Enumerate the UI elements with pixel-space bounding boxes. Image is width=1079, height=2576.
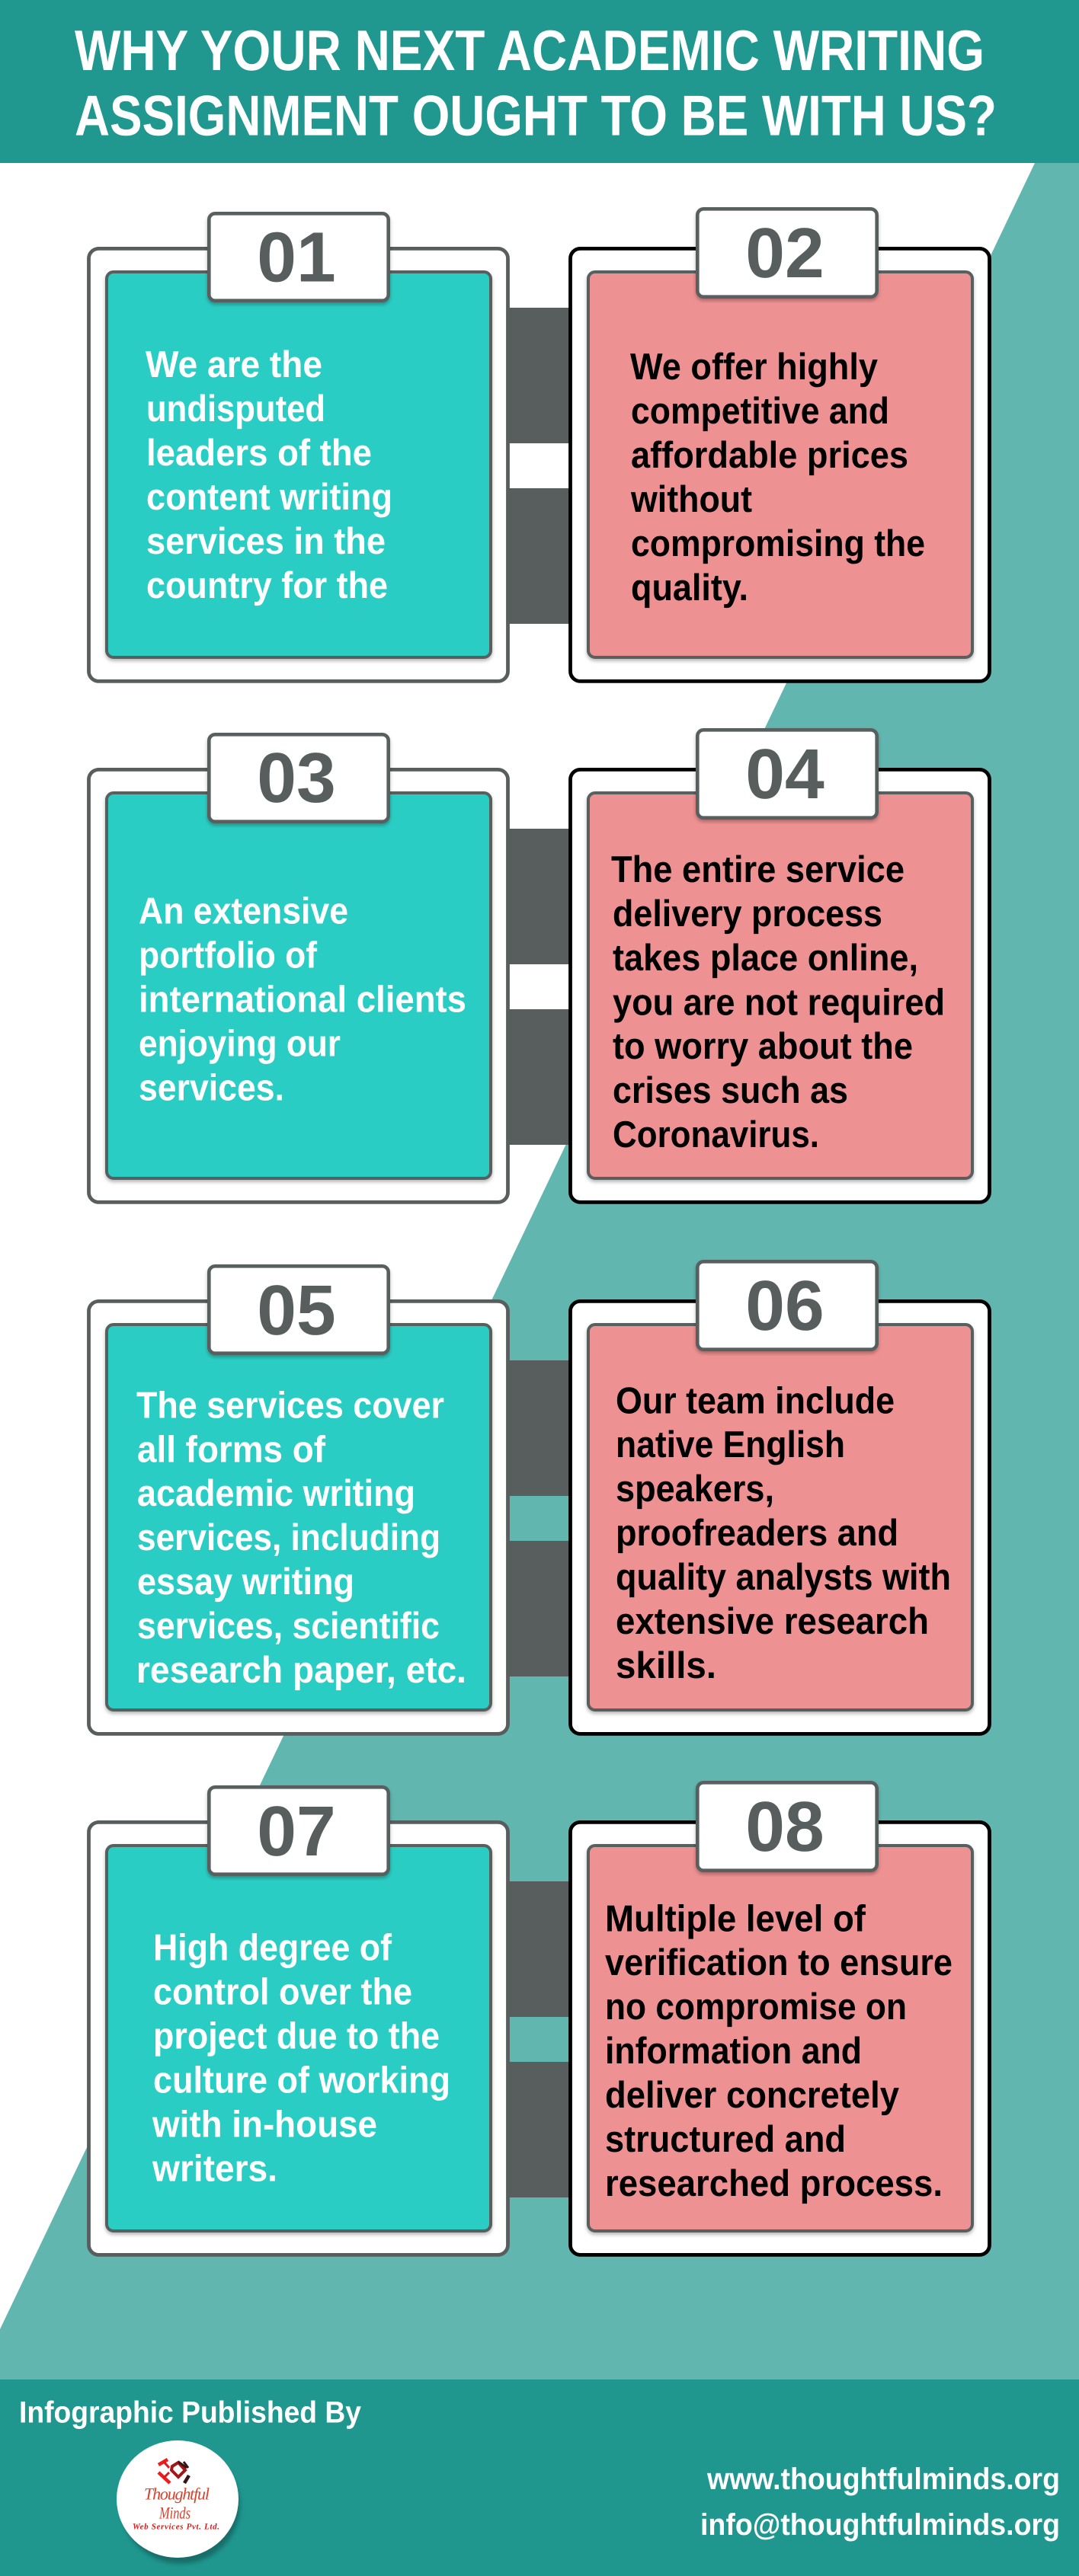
header banner (0, 0, 1079, 163)
text: card 04: you are not required (613, 982, 945, 1023)
title (75, 18, 997, 148)
badge: 03 (209, 734, 389, 822)
panel: card 07 (88, 1787, 507, 2255)
badge: 04 (697, 730, 877, 818)
text: card 08: information and (605, 2031, 862, 2072)
text: card 02: We offer highly (630, 347, 878, 388)
text: card 06: Our team include (616, 1380, 895, 1421)
text: card 02: quality. (631, 567, 748, 609)
email: info@thoughtfulminds.org (700, 2508, 1060, 2542)
badge: 04: 04 (745, 734, 824, 813)
panel: card 04 (570, 730, 989, 1202)
text: card 05: essay writing (137, 1561, 354, 1603)
text: card 05: academic writing (137, 1473, 415, 1514)
badge: 08 (697, 1782, 877, 1871)
text: card 02: competitive and (631, 391, 889, 432)
text: card 08: verification to ensure (605, 1942, 953, 1983)
text: card 06 (616, 1380, 951, 1686)
connectors: row 4 (507, 1881, 571, 2197)
text: card 01: country for the (146, 565, 388, 606)
footer band (0, 2379, 1079, 2576)
badge: 06 (697, 1261, 877, 1350)
text: card 03: enjoying our (139, 1023, 341, 1064)
text: card 05: services, including (137, 1517, 440, 1558)
text: card 05: The services cover (136, 1385, 444, 1426)
text: card 08 (605, 1898, 953, 2204)
panel: card 06 (570, 1261, 989, 1734)
text: card 03: portfolio of (139, 935, 318, 976)
text: card 07: culture of working (153, 2060, 450, 2101)
text: card 05: research paper, etc. (136, 1650, 466, 1691)
website: www.thoughtfulminds.org (706, 2463, 1060, 2496)
text: card 04 (611, 849, 945, 1155)
text: card 02: affordable prices (631, 435, 908, 476)
text: card 01 (146, 344, 392, 606)
text: card 04: to worry about the (613, 1026, 913, 1067)
badge: 01 (209, 213, 389, 301)
text: card 04: takes place online, (613, 938, 918, 979)
logo tagline: Web Services Pvt. Ltd. (133, 2523, 219, 2532)
text: card 05: all forms of (137, 1429, 326, 1470)
text: card 02 (630, 347, 925, 609)
text: card 06: skills. (616, 1645, 716, 1686)
text: card 07: with in-house (152, 2105, 377, 2146)
text: card 02: compromising the (631, 523, 925, 564)
text: card 06: quality analysts with (616, 1557, 951, 1598)
text: card 02: without (630, 479, 752, 520)
text: card 08: no compromise on (605, 1986, 907, 2028)
text: card 08: researched process. (605, 2163, 943, 2204)
badge: 02 (697, 209, 877, 297)
text: card 01: leaders of the (146, 433, 372, 474)
panel: card 08 (570, 1782, 989, 2255)
panel: card 05 (88, 1266, 507, 1734)
panel: card 03 (88, 734, 507, 1202)
logo (117, 2440, 240, 2564)
text: card 04: Coronavirus. (613, 1114, 819, 1155)
text: card 03: An extensive (139, 891, 348, 932)
text: card 07: writers. (152, 2149, 277, 2190)
text: card 06: extensive research (616, 1601, 929, 1642)
text: card 04: The entire service (611, 849, 905, 890)
text: card 01: undisputed (146, 388, 325, 430)
text: card 05 (136, 1385, 466, 1691)
text: card 05: services, scientific (137, 1606, 440, 1647)
badge: 08: 08 (745, 1787, 824, 1866)
badge: 06: 06 (745, 1266, 824, 1345)
text: card 01: content writing (146, 477, 392, 518)
connectors: row 3 (507, 1360, 571, 1676)
text: card 03: international clients (139, 980, 466, 1021)
text: card 08: deliver concretely (605, 2075, 899, 2116)
text: card 03: services. (139, 1067, 284, 1108)
text: card 07: control over the (153, 1972, 412, 2013)
connectors: row 2 (507, 829, 571, 1145)
text: card 07: High degree of (153, 1928, 392, 1969)
text: card 04: delivery process (613, 893, 882, 935)
text: card 07 (152, 1928, 450, 2190)
icon: logo mark (158, 2459, 189, 2483)
text: card 01: services in the (146, 521, 386, 562)
text: card 04: crises such as (613, 1070, 848, 1111)
text: card 03 (139, 891, 466, 1108)
text: card 06: speakers, (616, 1469, 774, 1510)
text: card 06: native English (616, 1424, 845, 1465)
badge: 05: 05 (257, 1270, 336, 1350)
text: card 01: We are the (146, 344, 322, 385)
publisher label: Infographic Published By (19, 2396, 362, 2430)
text: card 08: Multiple level of (605, 1898, 866, 1939)
badge: 03: 03 (257, 738, 336, 817)
text: card 06: proofreaders and (616, 1513, 898, 1554)
panel: card 01 (88, 213, 507, 681)
badge: 07 (209, 1787, 389, 1874)
badge: 05 (209, 1266, 389, 1354)
connectors: row 1 (507, 308, 571, 624)
logo wordmark: Thoughtful (144, 2485, 210, 2504)
badge: 01: 01 (257, 218, 336, 297)
badge: 02: 02 (745, 213, 824, 292)
text: card 08: structured and (605, 2119, 846, 2160)
panel: card 02 (570, 209, 989, 681)
text: card 07: project due to the (153, 2016, 440, 2057)
logo wordmark line 2: Minds (158, 2504, 191, 2523)
badge: 07: 07 (257, 1791, 336, 1871)
